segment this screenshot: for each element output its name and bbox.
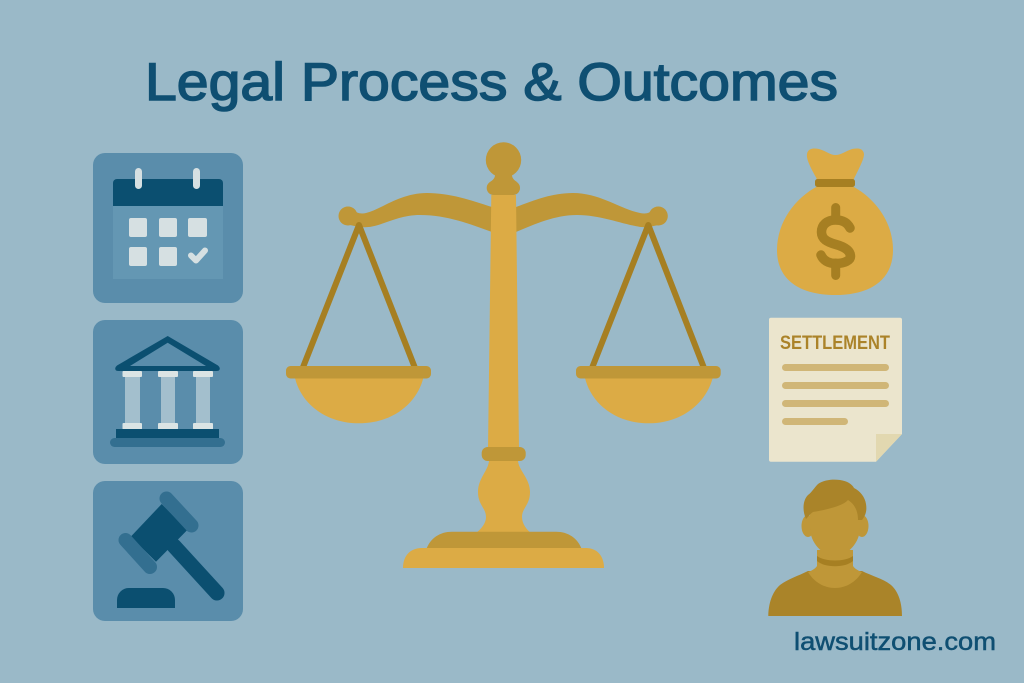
lower stem: [476, 460, 531, 533]
panel: courthouse icon: [93, 320, 243, 464]
panel: gavel icon: [93, 481, 243, 621]
icon: person: [768, 480, 902, 616]
title: Legal Process & Outcomes: [145, 53, 838, 112]
document: settlement: SETTLEMENT: [780, 333, 890, 354]
beam: [338, 206, 358, 226]
post: [488, 195, 519, 449]
finial: [486, 142, 521, 178]
scales of justice: [286, 142, 721, 568]
document: settlement: [769, 318, 902, 462]
panel: calendar icon: [93, 153, 243, 303]
website label: lawsuitzone.com: [794, 628, 996, 656]
icon: money bag: [777, 149, 893, 295]
right pan: [592, 225, 704, 368]
left pan: [303, 225, 415, 368]
base: [426, 532, 582, 550]
